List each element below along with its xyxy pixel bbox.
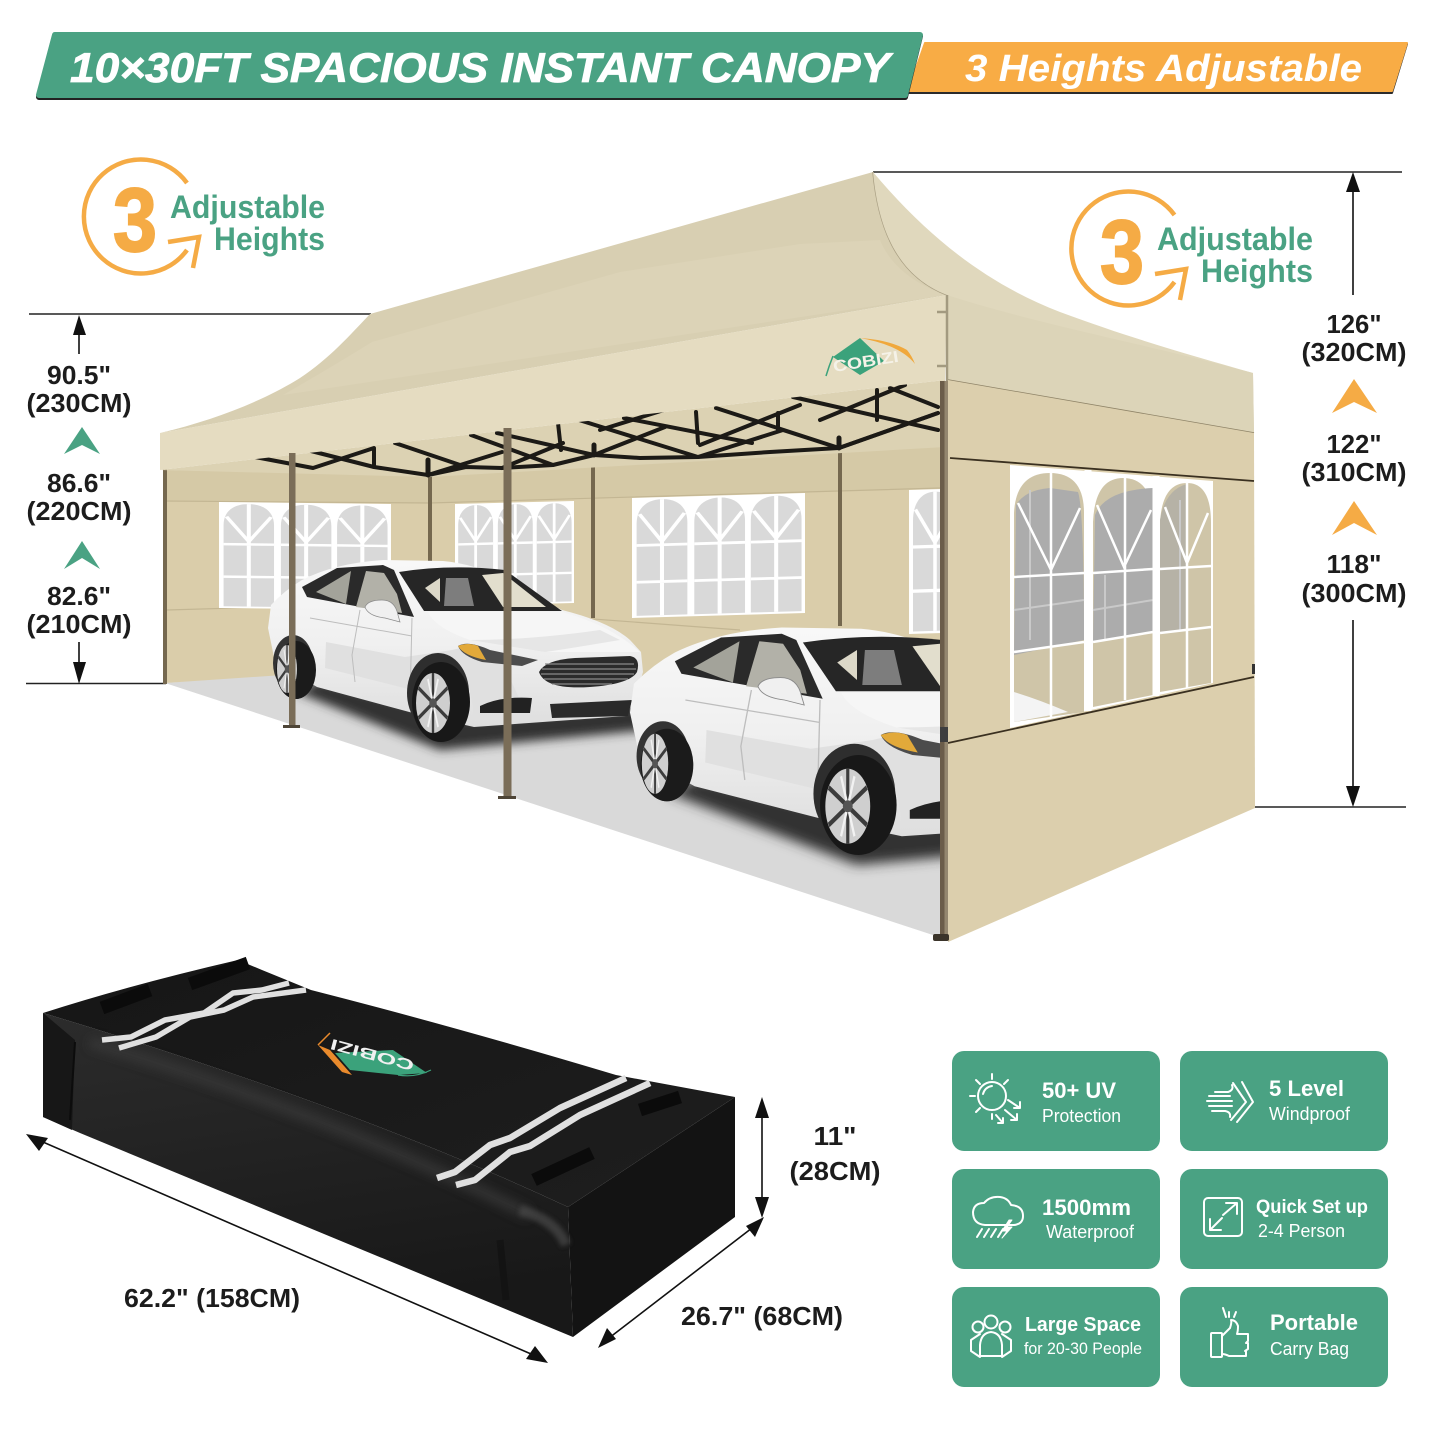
feature card: quick set up: [1180, 1169, 1388, 1269]
feature card: 1500mm waterproof: 1500mm: [1042, 1195, 1131, 1220]
feature card: 1500mm waterproof: [952, 1169, 1160, 1269]
feature card: large space: [952, 1287, 1160, 1387]
left height dimensions: [26, 314, 371, 684]
feature card: 5 level windproof: 5 Level: [1269, 1076, 1344, 1101]
badge: 3 adjustable heights right: Adjustable: [1157, 221, 1313, 257]
feature card: quick set up: Quick Set up: [1256, 1197, 1368, 1218]
right wall seams: [948, 458, 1254, 743]
corner post: [933, 381, 1255, 941]
bag dimension labels: (28CM): [790, 1156, 880, 1186]
feature card: 5 level windproof: [1180, 1051, 1388, 1151]
badge: 3 adjustable heights right: [1071, 192, 1313, 306]
reflective stripes: [102, 983, 650, 1185]
icon: rain cloud: [973, 1197, 1023, 1238]
car 1: [268, 560, 648, 750]
bag logo: [318, 1033, 431, 1076]
feature card: large space: Large Space: [1025, 1314, 1141, 1336]
right height dimensions: (320CM): [1302, 337, 1406, 367]
right wall window: [1010, 465, 1213, 728]
bag logo: COBIZI: [329, 1035, 416, 1074]
logo: cobizi on canopy: COBIZI: [832, 349, 900, 376]
badge: 3 adjustable heights right: 3: [1100, 203, 1144, 303]
front valance: [160, 295, 947, 470]
right height dimensions: 122": [1326, 429, 1382, 459]
bag dimension labels: 11": [814, 1121, 856, 1151]
icon: wind: [1207, 1082, 1253, 1122]
banner: 10x30ft spacious instant canopy: [39, 35, 920, 97]
bag dimension labels: 26.7" (68CM): [681, 1301, 843, 1331]
feature card: quick set up: 2-4 Person: [1258, 1221, 1345, 1241]
bag dimension arrows: [26, 1097, 769, 1363]
front posts: [283, 428, 516, 799]
left height dimensions: 90.5": [47, 360, 111, 390]
banner: 3 heights adjustable: 3 Heights Adjustable: [965, 48, 1362, 90]
canopy underside: [160, 380, 945, 477]
canopy tent illustration: [160, 172, 1255, 942]
badge: 3 adjustable heights left: [84, 159, 325, 274]
feature card: portable carry bag: [1180, 1287, 1388, 1387]
valance seam and tabs: [937, 295, 947, 381]
bag dimension labels: [124, 1121, 880, 1331]
left height dimensions: (230CM): [26, 388, 132, 418]
bag handles: [102, 963, 680, 1180]
steel frame lattice: [255, 385, 938, 475]
back walls: [165, 445, 940, 725]
car 2: [630, 628, 940, 874]
canopy roof: [160, 172, 1254, 433]
badge: 3 adjustable heights right: Heights: [1201, 253, 1313, 289]
feature card: 50+ UV protection: [952, 1051, 1160, 1151]
right height dimensions: 118": [1326, 549, 1382, 579]
left height dimensions: 86.6": [47, 468, 111, 498]
right side wall: [948, 380, 1255, 942]
right height dimensions: (310CM): [1302, 457, 1406, 487]
feature card: large space: for 20-30 People: [1024, 1339, 1142, 1358]
feature card: portable carry bag: Carry Bag: [1270, 1339, 1349, 1359]
feature card: portable carry bag: Portable: [1270, 1310, 1358, 1335]
badge: 3 adjustable heights left: Adjustable: [170, 189, 325, 225]
left height dimensions: 82.6": [47, 581, 111, 611]
feature card: 50+ UV protection: Protection: [1042, 1106, 1121, 1126]
feature card: 5 level windproof: Windproof: [1269, 1104, 1351, 1124]
icon: sun: [970, 1074, 1020, 1123]
feature card: 50+ UV protection: 50+ UV: [1042, 1078, 1116, 1103]
logo: cobizi on canopy: [826, 338, 915, 376]
left height dimensions: (220CM): [26, 496, 132, 526]
carry bag illustration: [43, 960, 735, 1337]
left height dimensions: (210CM): [26, 609, 132, 639]
badge: 3 adjustable heights left: Heights: [214, 221, 325, 257]
floor: [165, 660, 945, 938]
feature card: 1500mm waterproof: Waterproof: [1046, 1222, 1135, 1242]
right height dimensions: 126": [1326, 309, 1382, 339]
banner: 3 heights adjustable: [908, 43, 1407, 93]
banner: 10x30ft spacious instant canopy: 10×30FT SPACIOUS INSTANT CANOPY: [70, 44, 894, 91]
right height dimensions: [873, 172, 1406, 807]
back posts: [163, 440, 842, 684]
right height dimensions: (300CM): [1302, 578, 1406, 608]
back wall windows: [219, 486, 1059, 634]
badge: 3 adjustable heights left: 3: [113, 171, 157, 271]
icon: thumbs up: [1211, 1308, 1248, 1357]
icon: people: [971, 1316, 1011, 1357]
bag dimension labels: 62.2" (158CM): [124, 1283, 300, 1313]
icon: expand: [1204, 1198, 1242, 1236]
